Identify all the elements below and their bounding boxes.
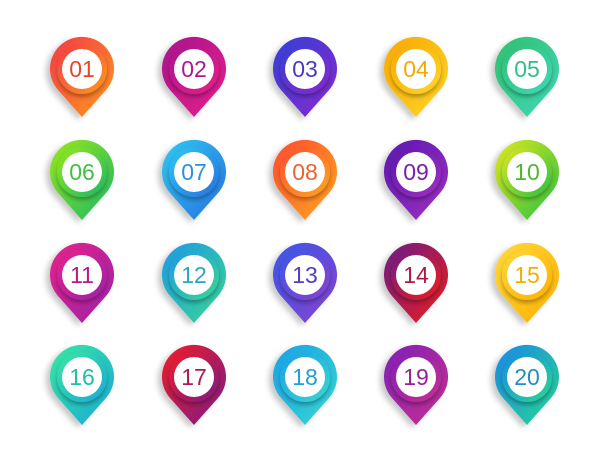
pin 07 (162, 140, 226, 220)
pin 14: 14 (403, 262, 429, 288)
pin 01: 01 (69, 56, 95, 82)
pin 18: 18 (292, 364, 318, 390)
pin 08: 08 (292, 159, 318, 185)
pin 09: 09 (403, 159, 429, 185)
pin 17: 17 (181, 364, 207, 390)
pin 16 (50, 345, 114, 425)
pin 04: 04 (403, 56, 429, 82)
pin 04 (384, 37, 448, 117)
pin 20: 20 (514, 364, 540, 390)
pin 03 (273, 37, 337, 117)
pin 06 (50, 140, 114, 220)
pin 14 (384, 243, 448, 323)
pin 09 (384, 140, 448, 220)
pin 02 (162, 37, 226, 117)
pin 07: 07 (181, 159, 207, 185)
pin 06: 06 (69, 159, 95, 185)
pin 08 (273, 140, 337, 220)
pin 19 (384, 345, 448, 425)
pin 12 (162, 243, 226, 323)
pin 12: 12 (181, 262, 207, 288)
pin 13: 13 (292, 262, 318, 288)
pin 05: 05 (514, 56, 540, 82)
pin 02: 02 (181, 56, 207, 82)
pin 18 (273, 345, 337, 425)
pin 20 (495, 345, 559, 425)
pin 15 (495, 243, 559, 323)
pin 05 (495, 37, 559, 117)
pin 17 (162, 345, 226, 425)
pin 01 (50, 37, 114, 117)
pin 19: 19 (403, 364, 429, 390)
pin 10: 10 (514, 159, 540, 185)
pin 03: 03 (292, 56, 318, 82)
pin 13 (273, 243, 337, 323)
pin 10 (495, 140, 559, 220)
pin 11 (50, 243, 114, 323)
pin 16: 16 (69, 364, 95, 390)
pin 15: 15 (514, 262, 540, 288)
pin 11: 11 (70, 262, 94, 288)
